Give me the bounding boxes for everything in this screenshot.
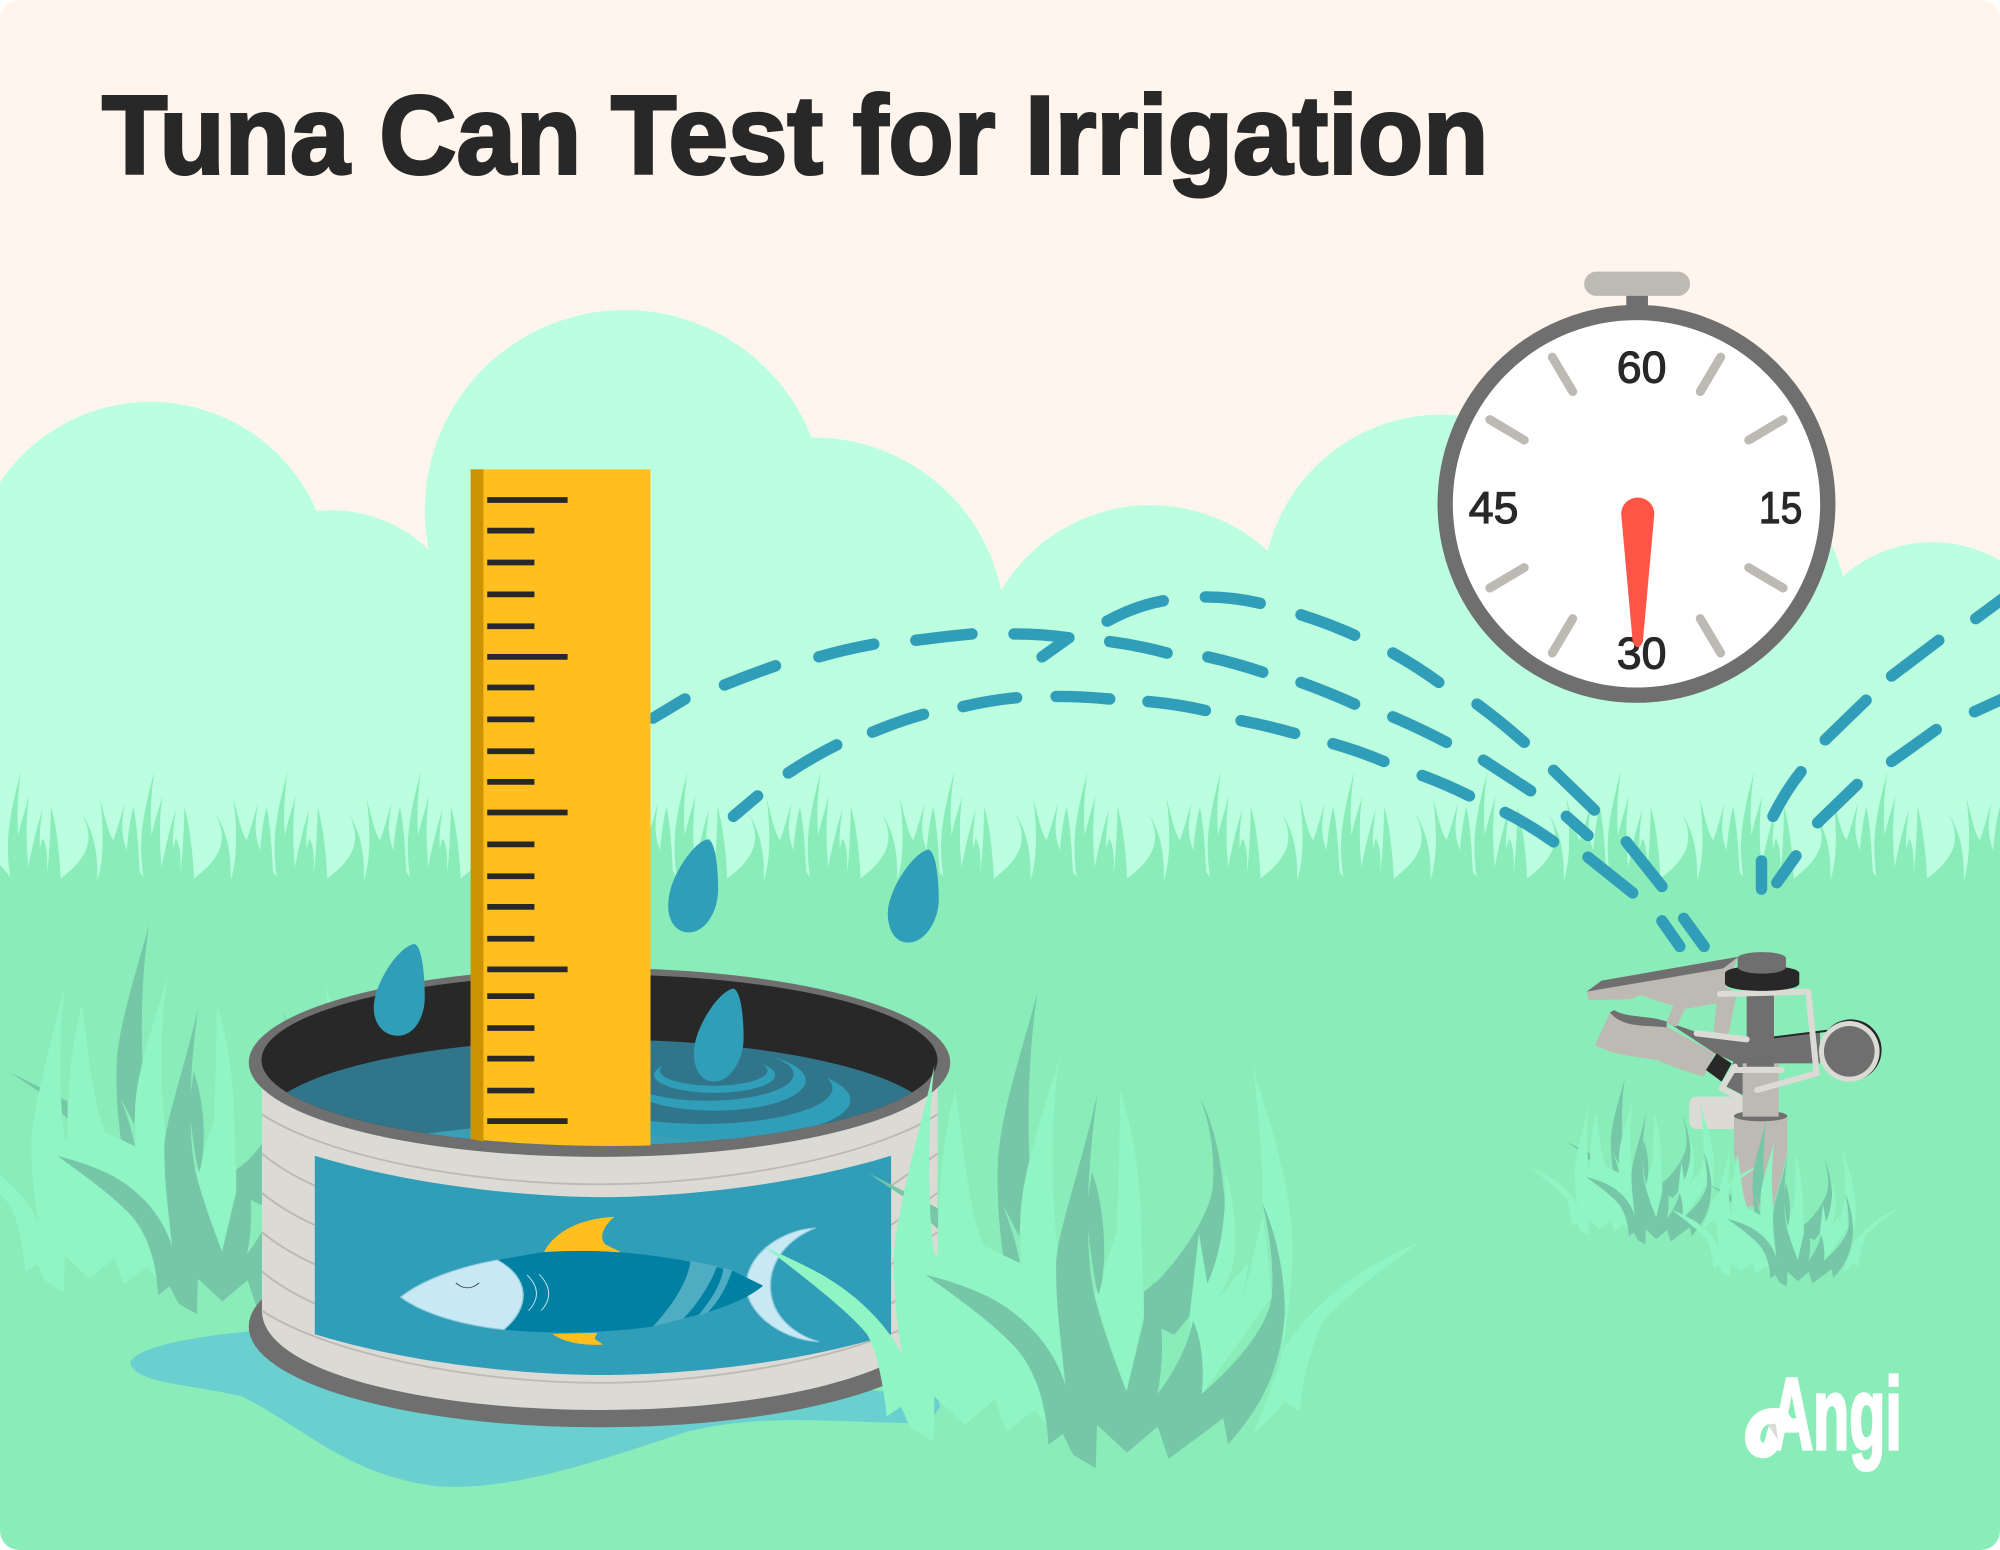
can body: [262, 1064, 938, 1410]
ruler edge: [471, 469, 483, 1142]
black cap: [1725, 952, 1799, 991]
water puddle: [130, 1330, 940, 1487]
dorsal fin: [544, 1217, 620, 1255]
can ribs: [262, 1114, 938, 1383]
sprinkler pipe: [1689, 1096, 1743, 1129]
lighter water reflection: [428, 1128, 790, 1144]
frame line dark: [1774, 1031, 1828, 1037]
sprinkler grass right: [1671, 1120, 1900, 1287]
tail: [746, 1228, 819, 1342]
stopwatch numbers: [1469, 344, 1802, 678]
water ripples: [650, 1056, 850, 1139]
stopwatch numbers: 15: [1759, 484, 1802, 533]
lawn ground: [0, 883, 2000, 1550]
stopwatch: [1445, 272, 1828, 695]
can label: [315, 1156, 891, 1375]
stopwatch numbers: 60: [1617, 344, 1666, 393]
background bushes: [0, 310, 2000, 906]
logo swirl: [1753, 1413, 1788, 1451]
can base rim: [248, 1299, 904, 1428]
ruler ticks: [487, 500, 568, 1121]
Angi logo: [1753, 1357, 1902, 1471]
counterweight disc: [1819, 1019, 1882, 1082]
foreground grass tuft: [764, 992, 1420, 1468]
fish body: [498, 1251, 763, 1333]
upper arm: [1587, 957, 1738, 1035]
sprinkler grass left: [1529, 1078, 1759, 1245]
sprinkler: [1587, 952, 1882, 1207]
stopwatch stem: [1626, 288, 1648, 311]
sprinkler riser: [1743, 1063, 1779, 1117]
can rim: [249, 968, 950, 1157]
sky background: [0, 0, 2000, 590]
stopwatch numbers: 45: [1469, 484, 1518, 533]
water spray arcs: [653, 597, 2000, 946]
stopwatch face: [1445, 313, 1828, 695]
tuna fish: [401, 1217, 819, 1345]
water in can: [287, 1040, 912, 1145]
can interior: [261, 974, 937, 1145]
stopwatch numbers: 30: [1617, 629, 1666, 678]
grass horizon: [0, 772, 2000, 893]
left grass tuft: [0, 925, 330, 1314]
ruler body: [471, 469, 651, 1146]
stopwatch hand: [1621, 497, 1654, 647]
counterweight arm: [1667, 1022, 1820, 1095]
title: Tuna Can Test for Irrigation: [102, 73, 1489, 197]
white frame: [1697, 992, 1817, 1097]
stopwatch ticks: [1490, 357, 1783, 653]
fish eye and gills: [456, 1283, 479, 1288]
sprinkler stake: [1734, 1117, 1787, 1207]
fish head: [401, 1260, 523, 1330]
logo fold: [1768, 1423, 1778, 1440]
logo wordmark: Angi: [1770, 1357, 1902, 1471]
nozzle: [1706, 1053, 1732, 1082]
tuna can: [249, 968, 950, 1427]
belly fin: [552, 1333, 603, 1345]
water drops: [374, 839, 939, 1082]
sprinkler column: [1747, 992, 1774, 1067]
measuring ruler: [471, 469, 651, 1146]
stopwatch button: [1584, 272, 1690, 296]
lower arm: [1595, 1013, 1715, 1077]
body stripes: [653, 1261, 732, 1327]
